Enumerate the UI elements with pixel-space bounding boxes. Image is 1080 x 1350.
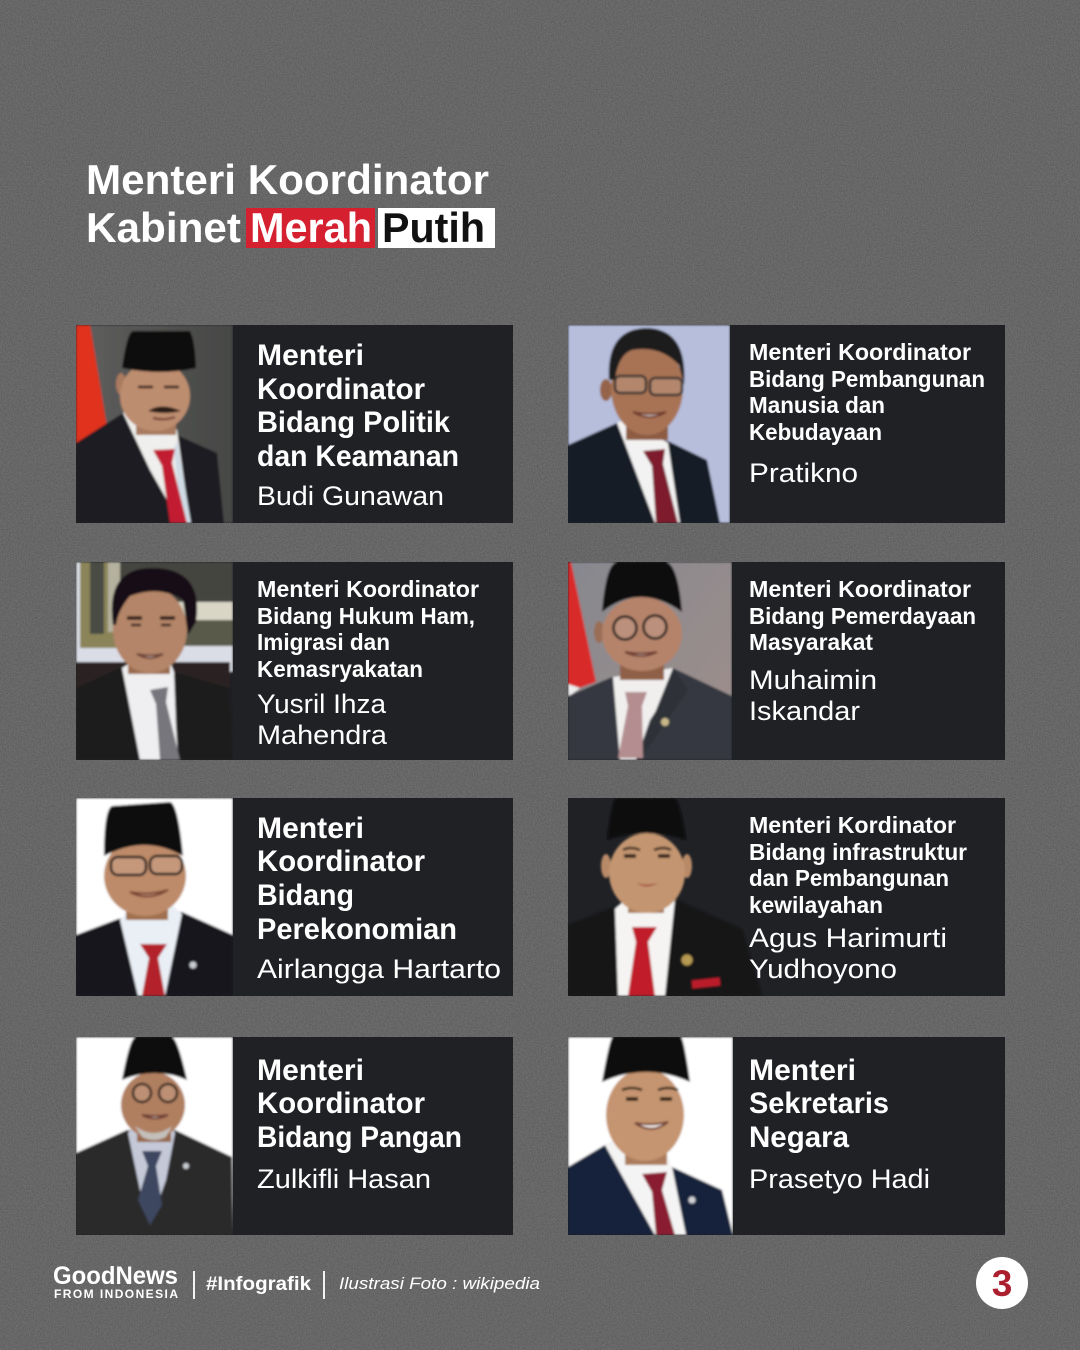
name: Agus Harimurti Yudhoyono: Yudhoyono <box>749 954 897 984</box>
title: Merah <box>250 204 372 251</box>
role: Yusril Ihza Mahendra: Menteri Koordinator <box>257 576 479 602</box>
role: Muhaimin Iskandar: Menteri Koordinator <box>749 576 971 602</box>
role: Airlangga Hartarto: Perekonomian <box>257 913 457 946</box>
role: Zulkifli Hasan <box>257 1054 462 1154</box>
name: Yusril Ihza Mahendra: Yusril Ihza <box>257 689 387 719</box>
name: Airlangga Hartarto: Airlangga Hartarto <box>257 954 501 984</box>
name: Budi Gunawan: Budi Gunawan <box>257 481 444 511</box>
role: Budi Gunawan: Bidang Politik <box>257 406 450 439</box>
role: Agus Harimurti Yudhoyono: kewilayahan <box>749 892 883 918</box>
name: Yusril Ihza Mahendra: Mahendra <box>257 720 388 750</box>
role: Airlangga Hartarto: Bidang <box>257 879 354 912</box>
name: Agus Harimurti Yudhoyono <box>749 923 947 984</box>
page number badge <box>976 1257 1028 1309</box>
role: Yusril Ihza Mahendra: Kemasryakatan <box>257 656 423 682</box>
role: Yusril Ihza Mahendra <box>257 576 479 682</box>
footer hashtag: #Infografik <box>206 1274 311 1295</box>
role: Agus Harimurti Yudhoyono: Bidang infrastruktur <box>749 839 967 865</box>
footer logo: GoodNews from Indonesia <box>53 1262 178 1301</box>
role: Pratikno: Bidang Pembangunan <box>749 366 985 392</box>
title <box>86 156 495 251</box>
photo: Agus Harimurti Yudhoyono <box>568 798 762 996</box>
panel: Muhaimin Iskandar <box>568 562 1005 760</box>
photo: Muhaimin Iskandar <box>568 562 732 760</box>
role: Zulkifli Hasan: Bidang Pangan <box>257 1121 462 1154</box>
title: Menteri Koordinator <box>86 156 489 203</box>
role: Pratikno: Kebudayaan <box>749 419 882 445</box>
photo: Budi Gunawan <box>76 325 233 523</box>
role: Budi Gunawan <box>257 339 459 473</box>
panel: Yusril Ihza Mahendra <box>76 562 513 760</box>
role: Agus Harimurti Yudhoyono <box>749 812 967 918</box>
role: Zulkifli Hasan: Koordinator <box>257 1087 425 1120</box>
role: Zulkifli Hasan: Menteri <box>257 1054 364 1087</box>
role: Agus Harimurti Yudhoyono: Menteri Kordinator <box>749 812 956 838</box>
role: Agus Harimurti Yudhoyono: dan Pembangunan <box>749 865 949 891</box>
role: Budi Gunawan: dan Keamanan <box>257 440 459 473</box>
role: Prasetyo Hadi: Menteri <box>749 1054 856 1087</box>
footer logo: GoodNews from Indonesia: GoodNews <box>53 1262 178 1290</box>
title: Kabinet <box>86 204 241 251</box>
panel: Airlangga Hartarto <box>76 798 513 996</box>
page number badge: 3 <box>992 1263 1012 1304</box>
name: Zulkifli Hasan: Zulkifli Hasan <box>257 1164 431 1194</box>
panel: Zulkifli Hasan <box>76 1037 513 1235</box>
footer photo credit: Ilustrasi Foto : wikipedia <box>339 1274 540 1293</box>
name: Muhaimin Iskandar <box>749 665 877 726</box>
name: Muhaimin Iskandar: Muhaimin <box>749 665 877 695</box>
role: Airlangga Hartarto: Koordinator <box>257 845 425 878</box>
panel: Budi Gunawan <box>76 325 513 523</box>
role: Muhaimin Iskandar: Masyarakat <box>749 629 873 655</box>
name: Pratikno: Pratikno <box>749 458 858 488</box>
panel: Pratikno <box>568 325 1005 523</box>
photo: Yusril Ihza Mahendra <box>76 562 233 760</box>
role: Muhaimin Iskandar: Bidang Pemerdayaan <box>749 603 976 629</box>
role: Yusril Ihza Mahendra: Imigrasi dan <box>257 629 390 655</box>
photo: Zulkifli Hasan <box>76 1037 233 1235</box>
name: Muhaimin Iskandar: Iskandar <box>749 696 860 726</box>
role: Pratikno: Menteri Koordinator <box>749 339 971 365</box>
role: Airlangga Hartarto: Menteri <box>257 812 364 845</box>
photo: Prasetyo Hadi <box>568 1037 733 1235</box>
role: Yusril Ihza Mahendra: Bidang Hukum Ham, <box>257 603 475 629</box>
title: Putih <box>382 204 485 251</box>
role: Airlangga Hartarto <box>257 812 457 946</box>
name: Agus Harimurti Yudhoyono: Agus Harimurti <box>749 923 947 953</box>
role: Muhaimin Iskandar <box>749 576 976 655</box>
role: Prasetyo Hadi: Sekretaris <box>749 1087 889 1120</box>
role: Prasetyo Hadi <box>749 1054 889 1154</box>
role: Prasetyo Hadi: Negara <box>749 1121 849 1154</box>
role: Budi Gunawan: Koordinator <box>257 373 425 406</box>
photo: Airlangga Hartarto <box>76 798 233 996</box>
panel: Agus Harimurti Yudhoyono <box>568 798 1005 996</box>
panel: Prasetyo Hadi <box>568 1037 1005 1235</box>
name: Yusril Ihza Mahendra <box>257 689 388 750</box>
role: Budi Gunawan: Menteri <box>257 339 364 372</box>
name: Prasetyo Hadi: Prasetyo Hadi <box>749 1164 930 1194</box>
role: Pratikno: Manusia dan <box>749 392 885 418</box>
role: Pratikno <box>749 339 985 445</box>
footer logo: GoodNews from Indonesia: FROM INDONESIA <box>54 1287 178 1301</box>
photo: Pratikno <box>568 325 730 523</box>
